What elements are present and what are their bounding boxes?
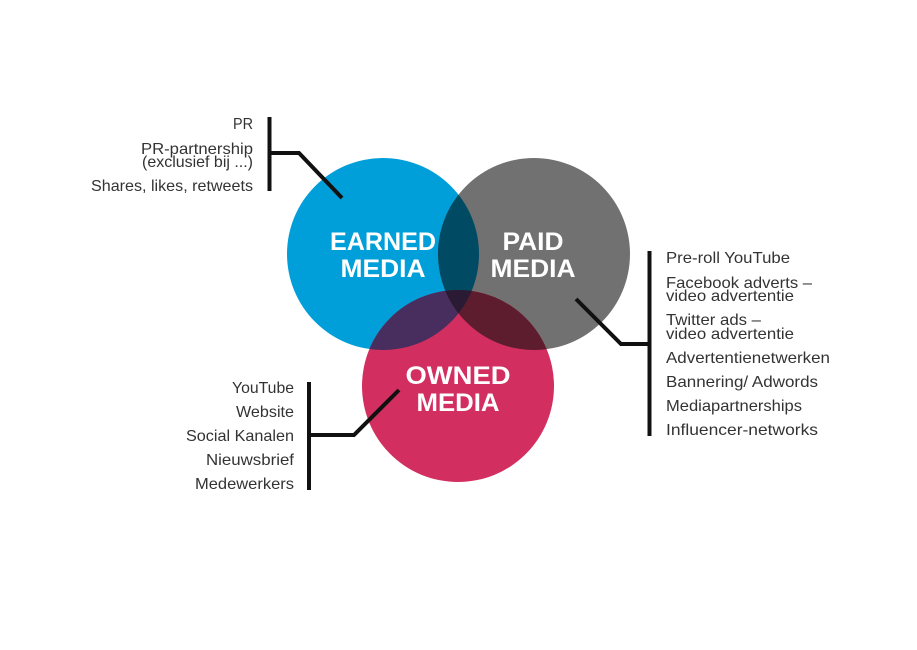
heading: paid media: PAID [502, 228, 564, 256]
list: paid media items: Pre-roll YouTube [666, 250, 790, 267]
overlap: earned and paid [438, 194, 479, 291]
venn infographic [92, 117, 829, 490]
overlap: paid and owned [446, 290, 546, 350]
venn diagram circles [287, 158, 630, 482]
circle: paid media [438, 158, 630, 350]
list: paid media items: Facebook adverts – [666, 275, 812, 292]
list: owned media items [186, 380, 295, 493]
list: owned media items: Nieuwsbrief [206, 452, 295, 469]
list: owned media items: Medewerkers [195, 476, 294, 493]
overlap: all three [446, 290, 472, 313]
list: paid media items: video advertentie [666, 288, 794, 305]
list: earned media items: PR [233, 116, 253, 133]
overlap: earned and owned [370, 290, 471, 350]
heading: earned media [330, 228, 436, 283]
connector: paid bracket [576, 251, 650, 436]
list: earned media items [91, 116, 253, 195]
list: owned media items: Website [236, 404, 294, 421]
circle: earned media [287, 158, 479, 350]
list: owned media items: Social Kanalen [186, 428, 294, 445]
list: earned media items: Shares, likes, retweets [91, 178, 253, 195]
list: paid media items [666, 250, 830, 439]
connector: owned bracket [309, 382, 399, 490]
heading: owned media [406, 362, 510, 417]
list: owned media items: YouTube [232, 380, 294, 397]
list: earned media items: PR-partnership [141, 141, 253, 158]
list: paid media items: Influencer-networks [666, 422, 818, 439]
heading: earned media: EARNED [330, 228, 436, 256]
list: paid media items: video advertentie [666, 326, 794, 343]
connector: earned bracket [270, 117, 342, 198]
list: earned media items: (exclusief bij ...) [142, 154, 253, 171]
heading: paid media: MEDIA [490, 255, 576, 283]
heading: paid media [490, 228, 576, 283]
heading: earned media: MEDIA [340, 255, 426, 283]
circle: owned media [362, 290, 554, 482]
list: paid media items: Advertentienetwerken [666, 350, 830, 367]
heading: owned media: OWNED [406, 362, 510, 390]
list: paid media items: Twitter ads – [666, 312, 761, 329]
heading: owned media: MEDIA [416, 389, 500, 417]
list: paid media items: Bannering/ Adwords [666, 374, 818, 391]
list: paid media items: Mediapartnerships [666, 398, 802, 415]
